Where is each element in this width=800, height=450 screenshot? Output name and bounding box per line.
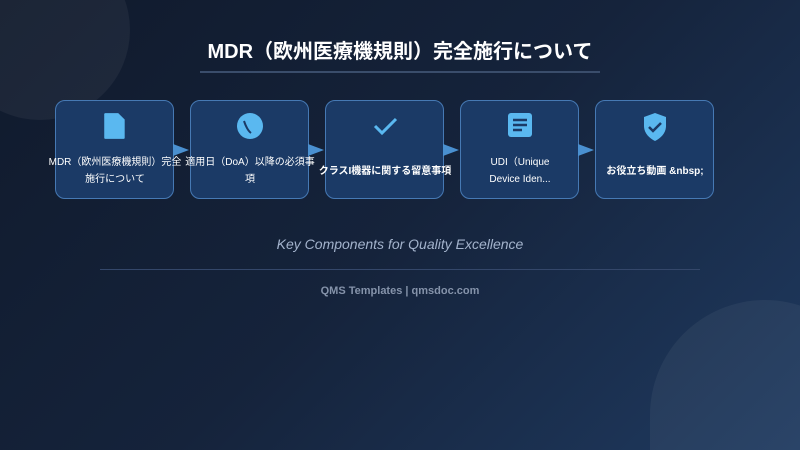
footer: QMS Templates | qmsdoc.com — [321, 285, 479, 297]
card 2: 項 — [245, 174, 255, 185]
card 5 — [595, 100, 714, 199]
arrow 1 — [173, 144, 189, 156]
icon: shield — [644, 113, 666, 141]
icon: note — [508, 113, 532, 137]
arrow 3 — [443, 144, 459, 156]
card 3 — [325, 100, 444, 199]
card 5: お役立ち動画 &nbsp; — [606, 166, 704, 176]
icon: check — [374, 118, 397, 135]
card 1 — [55, 100, 174, 199]
card 1: 施行について — [85, 174, 145, 185]
icon: circle — [237, 113, 263, 139]
card 2 — [190, 100, 309, 199]
card 3: クラスI機器に関する留意事項 — [319, 166, 451, 176]
arrow 4 — [578, 144, 594, 156]
card 4 — [460, 100, 579, 199]
title: MDR（欧州医療機規則）完全施行について — [208, 41, 592, 63]
card 1: MDR（欧州医療機規則）完全 — [49, 157, 181, 168]
card 2: 適用日（DoA）以降の必須事 — [185, 157, 315, 168]
icon: document — [104, 113, 125, 139]
arrow 2 — [308, 144, 324, 156]
card 4: Device Iden... — [489, 174, 551, 185]
card 4: UDI（Unique — [491, 157, 549, 168]
subtitle: Key Components for Quality Excellence — [277, 236, 523, 252]
